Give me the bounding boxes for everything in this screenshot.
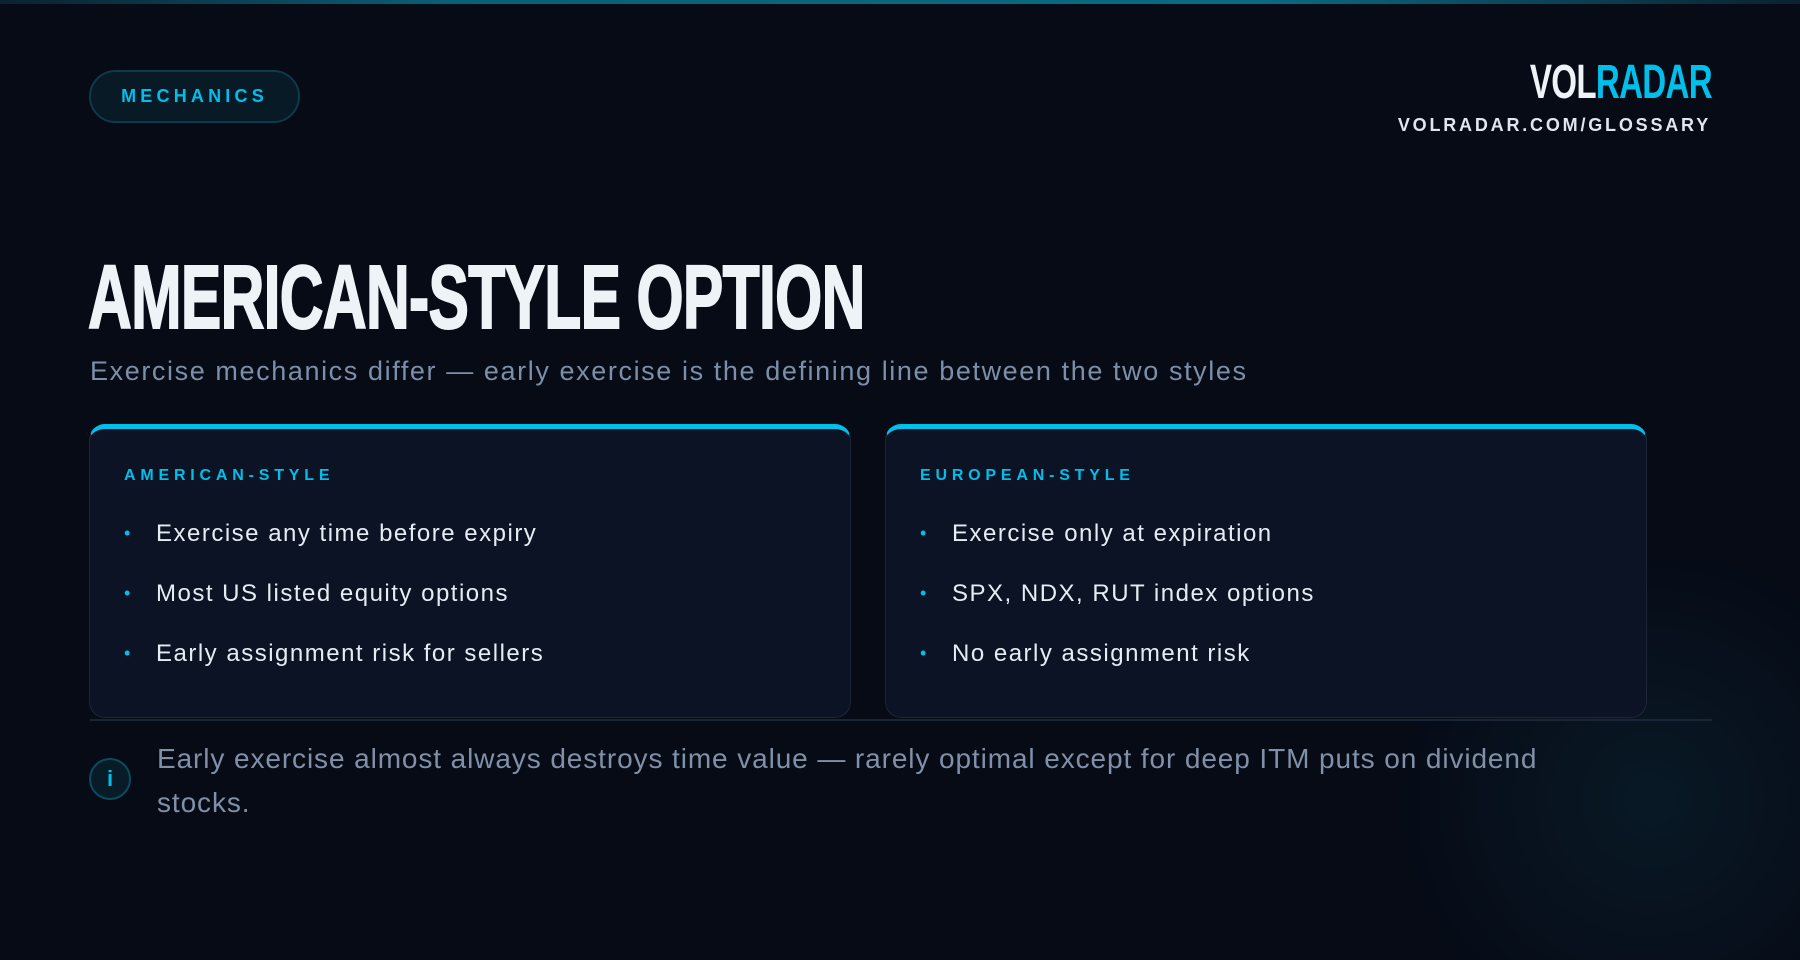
- bullet 3: •: [920, 643, 928, 663]
- note text: stocks.: [157, 787, 250, 818]
- bullet 2: SPX, NDX, RUT index options: [952, 580, 1315, 607]
- pill: category: [89, 70, 300, 123]
- bullet 3: No early assignment risk: [952, 640, 1251, 667]
- bullet 2: •: [920, 583, 928, 603]
- bullet 1: Exercise only at expiration: [952, 520, 1273, 547]
- note text: Early exercise almost always destroys time value — rarely optimal except for deep ITM puts on dividend: [157, 743, 1537, 774]
- note text: [157, 743, 1537, 818]
- subtitle: Exercise mechanics differ — early exercise is the defining line between the two styles: [90, 356, 1248, 386]
- bullet 3: Early assignment risk for sellers: [156, 640, 544, 667]
- bullet 2: Most US listed equity options: [156, 580, 509, 607]
- panel: american-style: [89, 424, 851, 718]
- title: AMERICAN-STYLE OPTION: [88, 248, 865, 348]
- bullet 1: •: [124, 523, 132, 543]
- card label: AMERICAN-STYLE: [124, 467, 334, 484]
- url: VOLRADAR.COM/GLOSSARY: [1398, 115, 1711, 135]
- logo: VOLRADAR: [1530, 56, 1712, 109]
- bullet 3: •: [124, 643, 132, 663]
- pill: category: MECHANICS: [121, 86, 268, 106]
- icon: info: i: [107, 766, 113, 791]
- icon: info: [89, 758, 131, 800]
- bullet 1: •: [920, 523, 928, 543]
- bullet 2: •: [124, 583, 132, 603]
- bullet 1: Exercise any time before expiry: [156, 520, 537, 547]
- panel: european-style: [885, 424, 1647, 718]
- card label: EUROPEAN-STYLE: [920, 467, 1135, 484]
